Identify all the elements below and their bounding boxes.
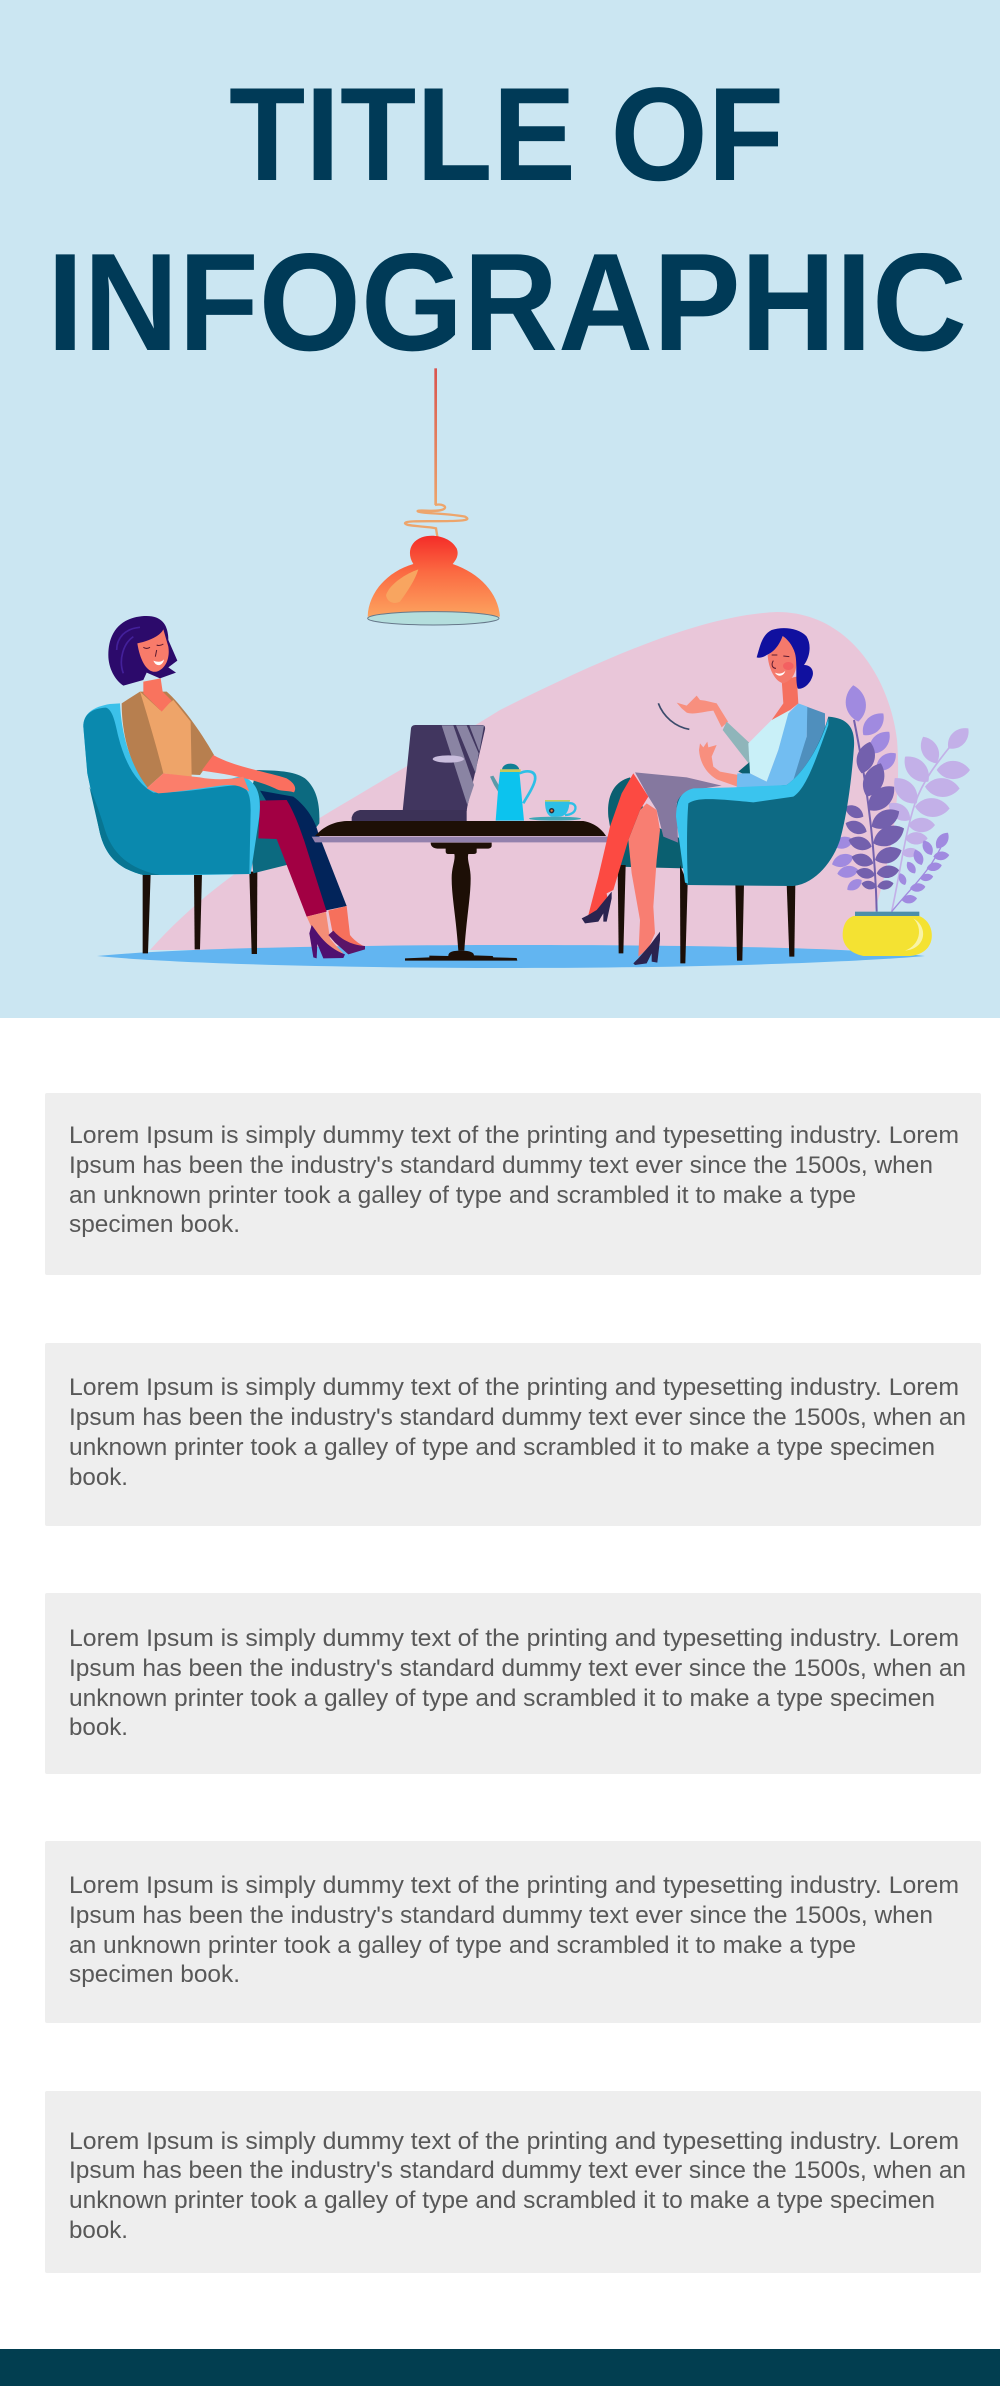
- panel 1 text: specimen book.: [69, 1211, 240, 1238]
- panel 3: [45, 1593, 981, 1774]
- teacup and saucer: [529, 800, 581, 821]
- plant and pot: [830, 684, 974, 956]
- left chair front: [83, 703, 260, 875]
- panel 1 text: Ipsum has been the industry's standard dummy text ever since the 1500s, when: [69, 1152, 933, 1179]
- panel 3 text: [69, 1625, 966, 1741]
- title: [47, 61, 967, 380]
- right woman skirt: [635, 772, 722, 843]
- panel 4: [45, 1841, 981, 2023]
- footer bar: [0, 2349, 1000, 2386]
- left woman shoes: [309, 925, 365, 958]
- panel 5 text: Lorem Ipsum is simply dummy text of the printing and typesetting industry. Lorem: [69, 2128, 959, 2155]
- hero background: [0, 0, 1000, 1018]
- panel 3 text: book.: [69, 1714, 128, 1741]
- panel 5: [45, 2091, 981, 2273]
- laptop: [352, 725, 485, 822]
- illustration: office conversation: [83, 368, 974, 968]
- panel 2 text: Lorem Ipsum is simply dummy text of the printing and typesetting industry. Lorem: [69, 1374, 959, 1401]
- left woman ankles: [307, 906, 365, 953]
- left chair legs: [143, 872, 257, 954]
- left woman arms: [147, 755, 295, 793]
- table: [312, 821, 608, 961]
- panel 5 text: Ipsum has been the industry's standard dummy text ever since the 1500s, when an: [69, 2157, 966, 2184]
- title: INFOGRAPHIC: [47, 225, 967, 380]
- right woman head: [757, 628, 813, 689]
- panel 2 text: Ipsum has been the industry's standard dummy text ever since the 1500s, when an: [69, 1404, 966, 1431]
- panel 1: [45, 1093, 981, 1275]
- right chair front: [676, 717, 854, 886]
- medium plants: [830, 684, 952, 912]
- left chair back seat: [247, 770, 319, 873]
- panel 1 text: [69, 1122, 959, 1238]
- panel 4 text: an unknown printer took a galley of type and scrambled it to make a type: [69, 1932, 856, 1959]
- right woman standing leg: [628, 803, 660, 957]
- panel 4 text: specimen book.: [69, 1961, 240, 1988]
- teapot: [490, 764, 535, 821]
- gesture arc: [658, 703, 689, 729]
- left woman head: [108, 616, 177, 686]
- panel 2 text: book.: [69, 1464, 128, 1491]
- panel 3 text: Lorem Ipsum is simply dummy text of the printing and typesetting industry. Lorem: [69, 1625, 959, 1652]
- right woman shoes: [582, 892, 660, 965]
- panel 5 text: [69, 2128, 966, 2244]
- panel 2: [45, 1343, 981, 1526]
- panel 3 text: unknown printer took a galley of type and scrambled it to make a type specimen: [69, 1685, 935, 1712]
- panel 4 text: Ipsum has been the industry's standard dummy text ever since the 1500s, when: [69, 1902, 933, 1929]
- light plant: [885, 723, 974, 912]
- dark plant: [842, 720, 908, 912]
- right woman in armchair: [582, 628, 854, 965]
- panel 3 text: Ipsum has been the industry's standard dummy text ever since the 1500s, when an: [69, 1655, 966, 1682]
- table, laptop and tea set: [312, 725, 608, 961]
- pink background blob: [150, 612, 898, 950]
- panel 4 text: [69, 1872, 959, 1988]
- floor: [97, 945, 925, 968]
- panel 4 text: Lorem Ipsum is simply dummy text of the printing and typesetting industry. Lorem: [69, 1872, 959, 1899]
- panel 1 text: an unknown printer took a galley of type and scrambled it to make a type: [69, 1182, 856, 1209]
- left woman in armchair: [83, 616, 365, 958]
- right woman crossed leg: [588, 773, 648, 915]
- panel 2 text: [69, 1374, 966, 1491]
- left woman torso: [122, 678, 214, 788]
- left woman trousers: [258, 791, 347, 917]
- right woman hands and arms: [677, 696, 752, 787]
- panel 5 text: book.: [69, 2217, 128, 2244]
- title: TITLE OF: [229, 61, 784, 209]
- right chair back seat and legs: [608, 777, 795, 963]
- yellow pot: [843, 912, 932, 956]
- pendant lamp: [368, 368, 500, 625]
- panel 1 text: Lorem Ipsum is simply dummy text of the printing and typesetting industry. Lorem: [69, 1122, 959, 1149]
- panel 2 text: unknown printer took a galley of type and scrambled it to make a type specimen: [69, 1434, 935, 1461]
- panel 5 text: unknown printer took a galley of type and scrambled it to make a type specimen: [69, 2187, 935, 2214]
- right woman torso: [737, 677, 825, 788]
